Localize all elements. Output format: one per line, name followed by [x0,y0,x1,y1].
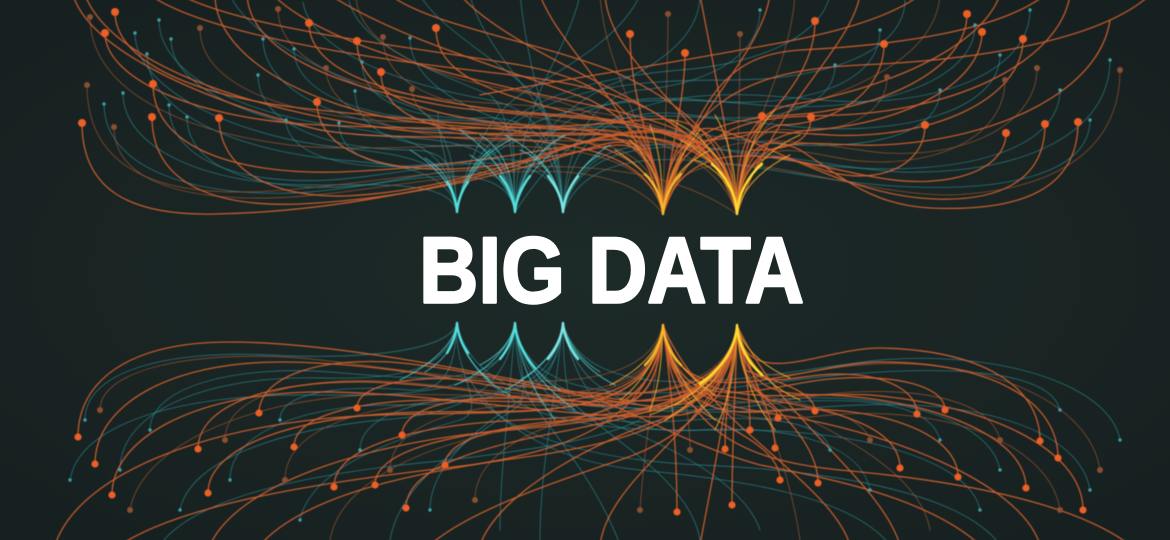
lower hub bright tips [447,323,762,384]
upper dim orange lines [87,0,1120,214]
yellow hub fans [615,110,800,214]
title: BIG DATA [419,218,804,322]
upper bright orange lines [73,0,1150,214]
lower teal hub fans [400,323,615,420]
upper data network [73,0,1150,214]
lower bright orange lines [55,325,1130,540]
lower dim orange lines [100,325,1100,540]
upper teal dots [102,8,1112,125]
lower orange dots [74,404,1087,516]
upper orange dots [78,8,1082,137]
lower teal dots [68,408,1122,522]
teal hub fans [410,130,610,212]
lower yellow hub fans [610,325,800,430]
lower teal lines [70,323,1120,540]
hub bright tips [447,164,762,214]
lower dim dots [97,407,1103,513]
upper dim dots [84,6,1123,130]
lower data network [55,323,1130,540]
upper teal lines [104,0,1110,212]
